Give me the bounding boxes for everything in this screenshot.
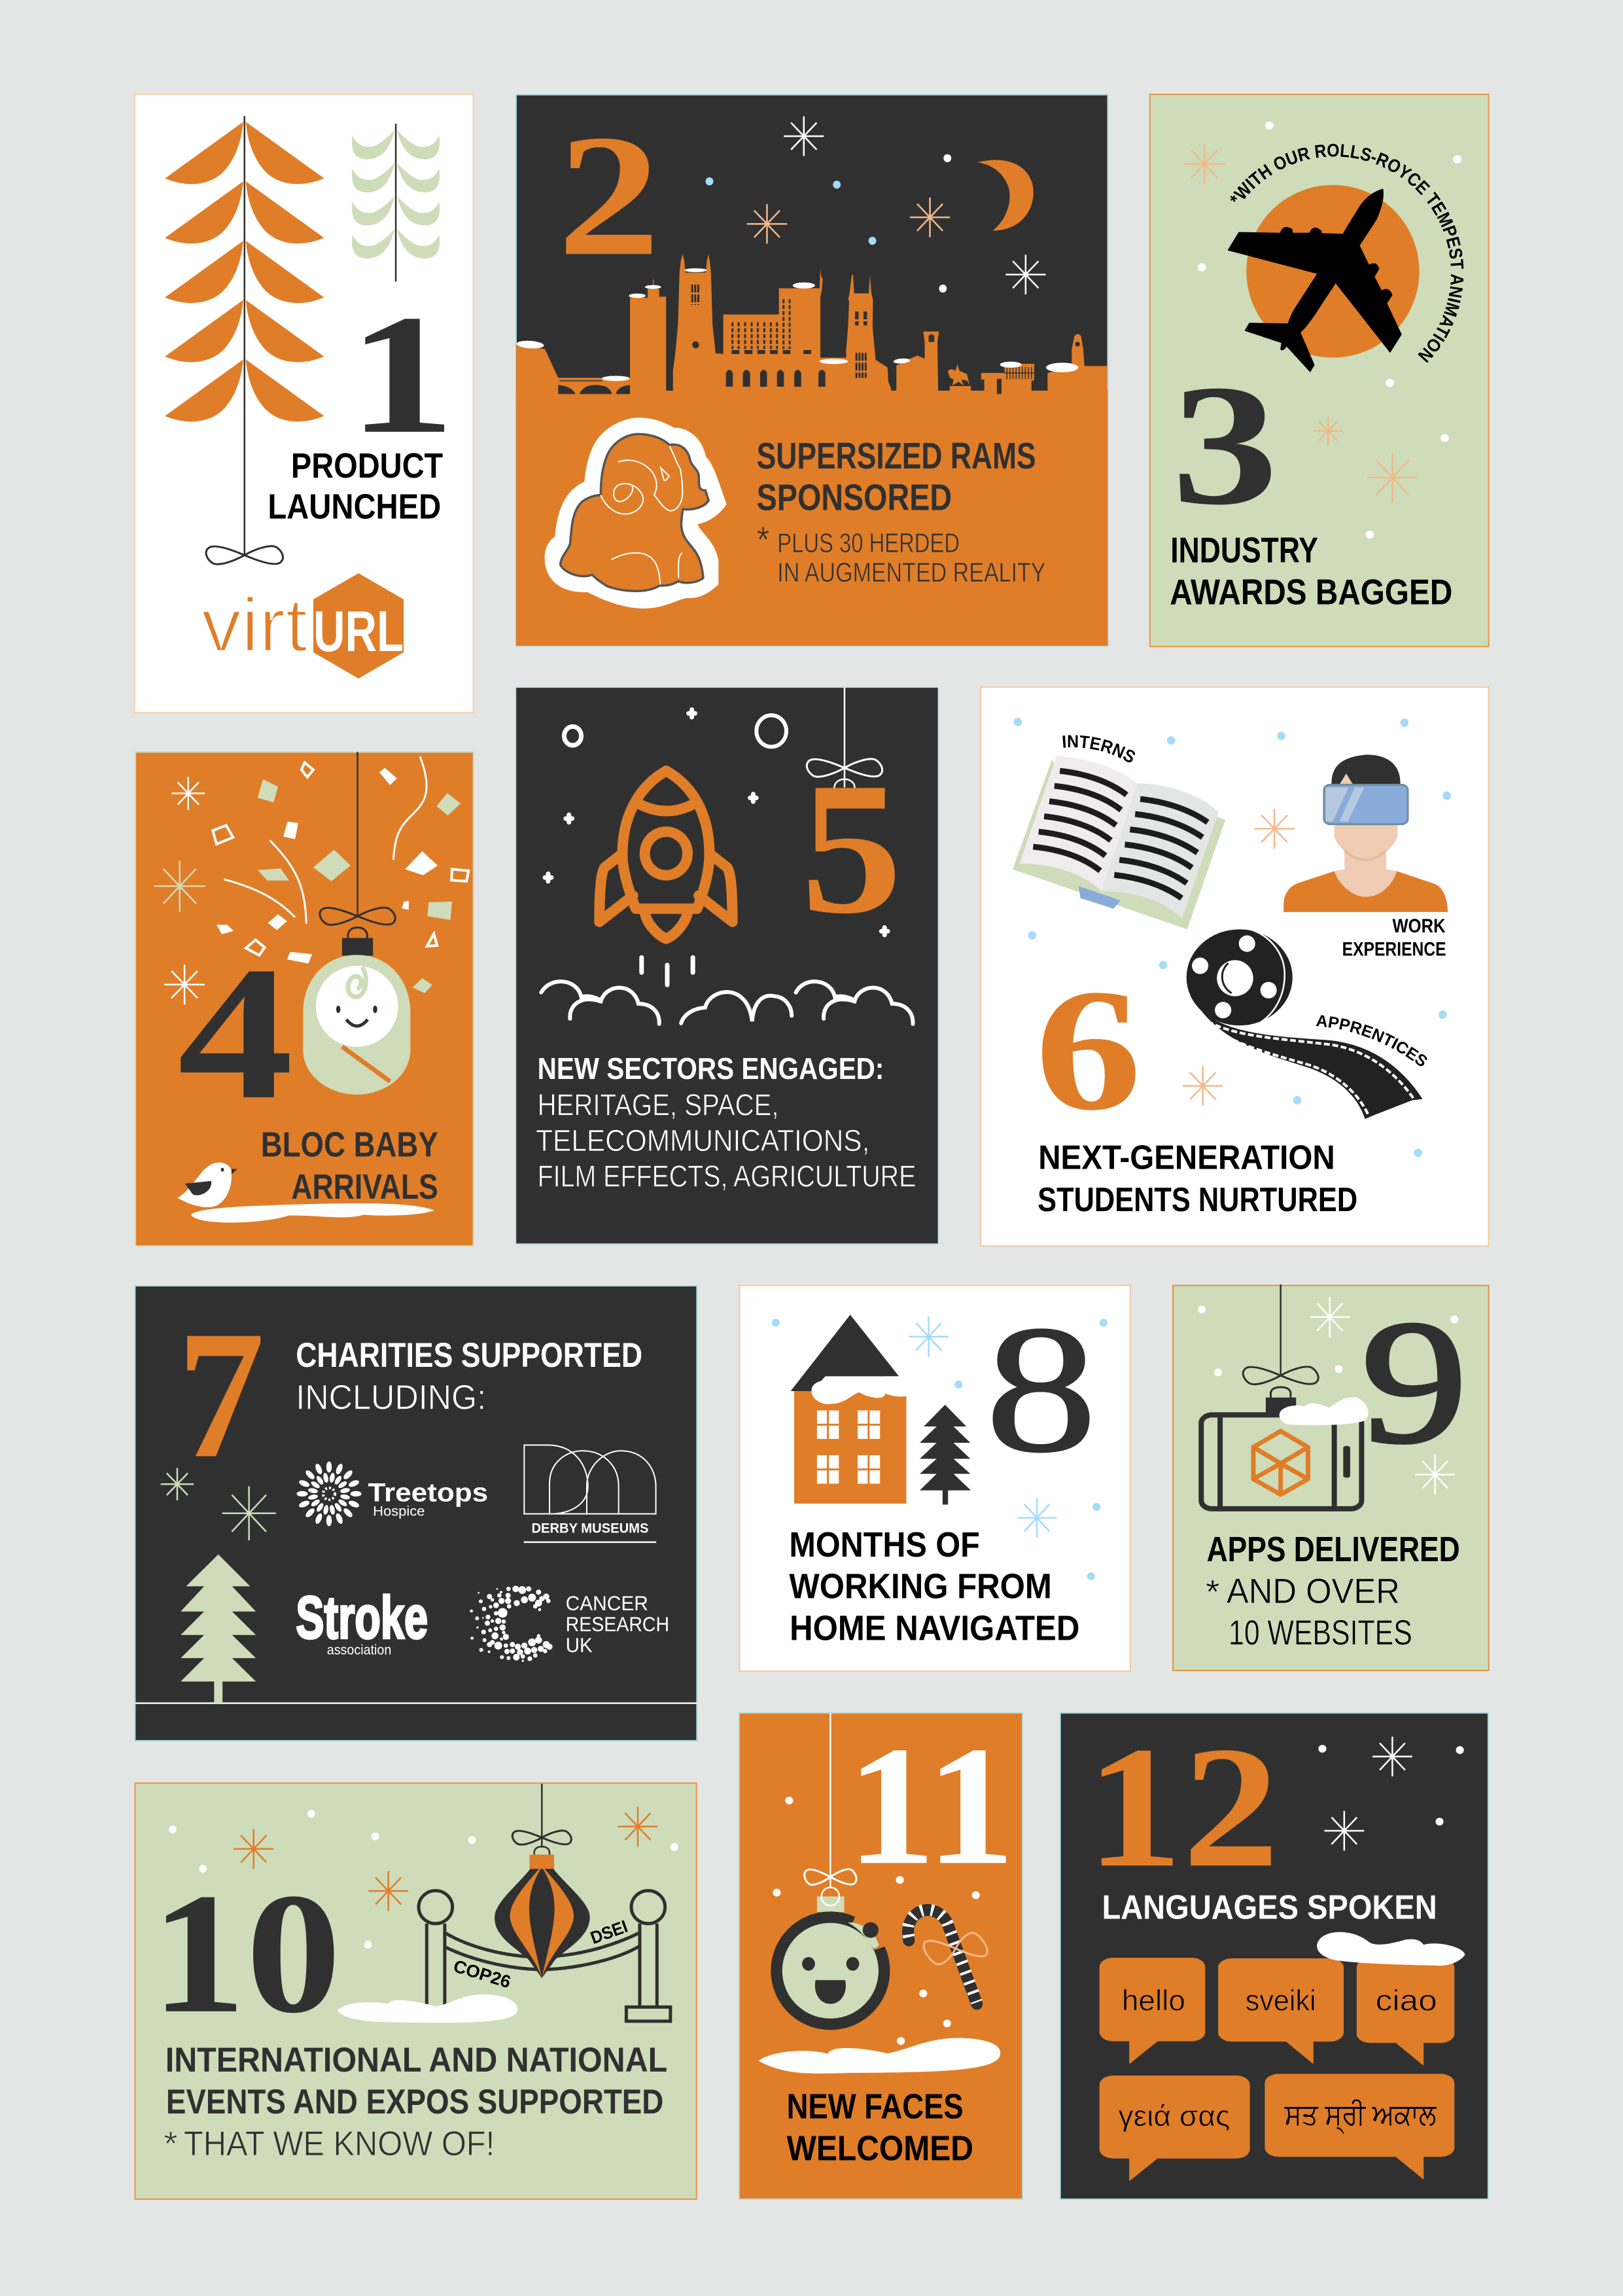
heading: months of working from home navigated: MONTHS OF	[789, 1525, 980, 1564]
moon	[978, 160, 1034, 230]
heading: industry awards bagged: AWARDS BAGGED	[1170, 573, 1452, 612]
panel 2: supersized rams: SUPERSIZED RAMS	[757, 436, 1036, 477]
speech bubble: sveiki: sveiki	[1246, 1985, 1316, 2017]
number 2: 2	[557, 99, 660, 292]
panel 4: bloc baby arrivals	[135, 752, 474, 1246]
speech bubble: punjabi	[1265, 2074, 1454, 2180]
logo: Cancer Research UK text: CANCER	[566, 1592, 648, 1615]
confetti	[213, 756, 468, 993]
note: that we know of: THAT WE KNOW OF!	[184, 2125, 495, 2163]
snow dots	[169, 1810, 678, 1949]
logo: Cancer Research UK text: UK	[566, 1634, 593, 1657]
heading: next-generation students nurtured: NEXT-GENERATION	[1038, 1139, 1335, 1176]
speech bubble: greek	[1100, 2075, 1250, 2181]
icon: phone bauble	[1201, 1284, 1369, 1509]
stars	[747, 116, 1045, 294]
snow dots	[773, 1797, 980, 2045]
icon: plane	[1227, 188, 1402, 372]
note: and over 10 websites: AND OVER	[1227, 1572, 1400, 1611]
number 1: 1	[348, 279, 455, 469]
number 5: 5	[801, 743, 902, 953]
orange sun	[1246, 185, 1420, 358]
note: augmented reality	[757, 520, 1045, 588]
heading: supersized rams sponsored	[757, 436, 1036, 518]
heading: next-generation students nurtured: STUDENTS NURTURED	[1038, 1181, 1357, 1218]
number 9: 9	[1361, 1284, 1467, 1479]
list of sectors: FILM EFFECTS, AGRICULTURE	[538, 1159, 916, 1193]
icon: person in VR headset	[1283, 754, 1448, 912]
heading: bloc baby arrivals: BLOC BABY	[261, 1125, 438, 1164]
icon: bird	[177, 1163, 237, 1207]
speech bubble: greek: γειά σας	[1119, 2100, 1230, 2132]
panel 11: new faces	[739, 1711, 1022, 2199]
heading: new faces welcomed: NEW FACES	[787, 2087, 964, 2126]
snow	[338, 1994, 517, 2022]
panel 9: apps delivered	[1173, 1284, 1489, 1670]
stars	[161, 1468, 276, 1540]
logo: Treetops Hospice text	[368, 1478, 488, 1519]
icon: tree	[181, 1555, 256, 1703]
icon: tree	[920, 1405, 971, 1505]
bauble with baby	[303, 752, 410, 1095]
speech bubble: sveiki	[1218, 1958, 1344, 2064]
logo: virtURL	[201, 573, 404, 679]
candy cane	[908, 1910, 990, 2004]
panel 1: product launched: PRODUCT	[291, 446, 443, 486]
green tree	[352, 124, 440, 281]
heading: months of working from home navigated: WORKING FROM	[789, 1567, 1052, 1606]
number 10: 10	[150, 1857, 341, 2049]
label: work experience: EXPERIENCE	[1342, 938, 1446, 961]
panel 7: charities supported	[135, 1286, 697, 1740]
snow dots	[1318, 1745, 1464, 1826]
icon: film reel	[1187, 929, 1423, 1119]
snow dots	[772, 1319, 1108, 1580]
note: augmented reality: *	[757, 520, 769, 561]
logo: Treetops Hospice text: Hospice	[373, 1504, 425, 1519]
logo: Cancer Research UK text: RESEARCH	[566, 1613, 669, 1636]
number 12: 12	[1086, 1711, 1279, 1903]
note: that we know of	[164, 2125, 495, 2163]
hanging bauble	[495, 1784, 590, 1978]
logo: Derby Museums: DERBY MUSEUMS	[531, 1521, 648, 1536]
logo: Derby Museums	[524, 1445, 656, 1542]
clouds	[541, 981, 913, 1024]
label: work experience	[1342, 915, 1446, 961]
logo: Stroke association: Stroke	[296, 1584, 428, 1651]
panel 3: industry awards	[1149, 94, 1490, 648]
planets and sparkles	[545, 710, 888, 935]
icon: rocket	[599, 771, 733, 939]
panel 10: international events	[135, 1783, 697, 2199]
heading: international and national events	[166, 2041, 667, 2121]
logo: Stroke association	[296, 1584, 428, 1658]
label: apprentices: APPRENTICES	[1316, 1016, 1427, 1067]
heading: international and national events: INTERNATIONAL AND NATIONAL	[166, 2041, 667, 2079]
heading: new faces welcomed: WELCOMED	[787, 2128, 973, 2168]
heading: new faces welcomed	[787, 2087, 973, 2168]
snow	[758, 2038, 1000, 2074]
stars	[1324, 1737, 1412, 1850]
bow on tree	[206, 546, 283, 564]
panel 5: new sectors	[515, 687, 939, 1244]
sticker: ram	[545, 417, 727, 609]
snow dots	[706, 154, 951, 292]
icon: house	[791, 1315, 906, 1504]
panel 8: working from home	[739, 1286, 1130, 1671]
stars	[909, 1316, 1056, 1538]
heading: next-generation students nurtured	[1038, 1139, 1357, 1218]
label: interns: INTERNS	[1062, 735, 1136, 763]
orange tree	[165, 116, 324, 555]
panel 1: product launched	[135, 94, 474, 713]
snow	[191, 1203, 434, 1223]
label: DSEI: DSEI	[588, 1916, 630, 1948]
snow on skyline	[515, 268, 1078, 381]
rocket exhaust	[642, 957, 693, 985]
heading: bloc baby arrivals	[261, 1125, 438, 1206]
stars	[1183, 809, 1295, 1106]
heading: product launched: LAUNCHED	[268, 487, 441, 526]
logo: Cancer Research UK dotted C	[470, 1585, 553, 1662]
label: COP26: COP26	[451, 1956, 513, 1992]
speech bubble: hello	[1100, 1958, 1205, 2064]
speech bubble: hello: hello	[1122, 1985, 1185, 2017]
logo: Cancer Research UK text	[566, 1592, 669, 1657]
number 11: 11	[846, 1711, 1015, 1900]
heading: international and national events: EVENTS AND EXPOS SUPPORTED	[166, 2083, 663, 2121]
heading: bloc baby arrivals: ARRIVALS	[291, 1167, 438, 1206]
logo: Stroke association: association	[327, 1642, 391, 1658]
logo: Treetops flower	[287, 1451, 372, 1536]
heading: new sectors engaged: NEW SECTORS ENGAGED:	[538, 1051, 884, 1086]
panel 2: supersized rams: IN AUGMENTED REALITY	[777, 556, 1045, 588]
logo: virtURL: virt	[201, 582, 307, 667]
logo: Treetops Hospice text: Treetops	[368, 1478, 488, 1507]
speech bubble: punjabi: ਸਤ ਸ੍ਰੀ ਅਕਾਲ	[1284, 2098, 1437, 2134]
skyline of Derby	[515, 254, 1107, 406]
smiling bauble	[771, 1713, 892, 2030]
number 4: 4	[177, 927, 294, 1139]
stars	[1310, 1297, 1455, 1495]
hanging bow	[807, 687, 882, 796]
snow	[1317, 1932, 1465, 1966]
subheading: including: INCLUDING:	[296, 1377, 486, 1417]
number 6: 6	[1035, 953, 1142, 1147]
label: work experience: WORK	[1393, 915, 1446, 937]
heading: months of working from home navigated	[789, 1525, 1079, 1648]
heading: charities supported: CHARITIES SUPPORTED	[296, 1335, 642, 1374]
stars	[154, 777, 205, 1004]
list of sectors	[536, 1088, 916, 1193]
note: that we know of: *	[164, 2125, 178, 2163]
curved caption: *WITH OUR ROLLS-ROYCE TEMPEST ANIMATION	[1230, 144, 1464, 363]
snow dots	[1198, 1305, 1458, 1376]
note: and over 10 websites	[1206, 1572, 1412, 1652]
note: and over 10 websites: *	[1206, 1573, 1219, 1610]
icon: book	[1013, 756, 1225, 929]
panel 2: supersized rams	[515, 95, 1108, 646]
heading: industry awards bagged	[1170, 531, 1452, 612]
heading: industry awards bagged: INDUSTRY	[1170, 531, 1318, 571]
panel 8: working from home: HOME NAVIGATED	[790, 1609, 1079, 1648]
heading: supersized rams sponsored: SPONSORED	[757, 477, 952, 518]
panel 12: languages spoken	[1060, 1711, 1488, 2199]
number 8: 8	[985, 1288, 1097, 1490]
panel 6: next-generation students	[980, 686, 1489, 1247]
heading: product launched	[268, 446, 443, 526]
number 3: 3	[1172, 349, 1278, 540]
stars	[1184, 144, 1418, 503]
note: augmented reality: PLUS 30 HERDED	[777, 527, 960, 558]
stars	[234, 1807, 657, 1911]
logo: virtURL: URL	[313, 599, 404, 663]
number 7: 7	[177, 1292, 265, 1496]
snow dots	[1014, 718, 1451, 1157]
list of sectors: TELECOMMUNICATIONS,	[536, 1123, 869, 1158]
speech bubble: ciao	[1357, 1958, 1454, 2066]
list of sectors: HERITAGE, SPACE,	[538, 1088, 779, 1122]
rope barrier	[419, 1891, 671, 2021]
speech bubble: ciao: ciao	[1376, 1985, 1437, 2017]
snow dots	[1198, 122, 1461, 539]
